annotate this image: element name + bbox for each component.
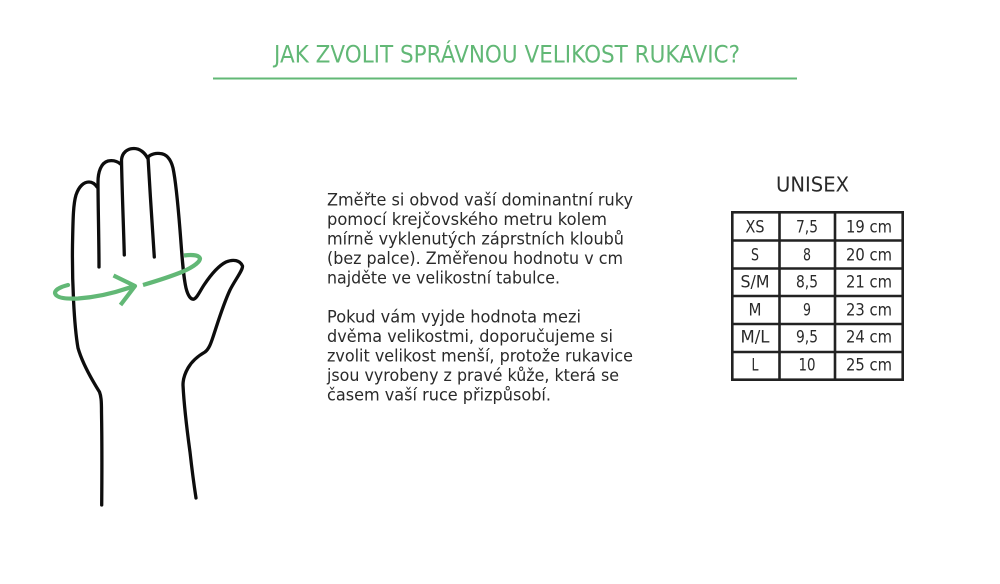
size table	[732, 212, 903, 380]
table row S: 20 cm	[846, 246, 892, 264]
text block: instructions	[326, 190, 633, 404]
table row XS	[746, 218, 892, 236]
paragraph 2	[326, 308, 633, 404]
icon: hand with measuring tape	[55, 148, 243, 505]
paragraph 1: mírně vyklenutých záprstních kloubů	[327, 230, 624, 248]
table row XS: 19 cm	[846, 218, 892, 236]
table row M: 23 cm	[846, 300, 892, 320]
title: JAK ZVOLIT SPRÁVNOU VELIKOST RUKAVIC?	[272, 40, 740, 68]
table row XS: 7,5	[796, 218, 818, 236]
table row M/L: 24 cm	[846, 328, 892, 346]
table row S/M: 21 cm	[846, 272, 892, 292]
table row S: S	[751, 246, 759, 264]
table row XS: XS	[746, 218, 764, 236]
table row M	[748, 300, 892, 320]
paragraph 2: časem vaší ruce přizpůsobí.	[327, 386, 551, 404]
paragraph 1: pomocí krejčovského metru kolem	[327, 210, 607, 229]
table row M/L: M/L	[740, 328, 770, 346]
table row S/M: 8,5	[796, 272, 818, 292]
paragraph 1: (bez palce). Změřenou hodnotu v cm	[327, 249, 623, 268]
paragraph 2: jsou vyrobeny z pravé kůže, která se	[326, 366, 619, 385]
paragraph 2: dvěma velikostmi, doporučujeme si	[327, 327, 613, 346]
green tape	[55, 255, 200, 305]
table row L: 25 cm	[846, 356, 892, 374]
table row L	[752, 356, 892, 374]
table row S	[751, 246, 892, 264]
paragraph 1: Změřte si obvod vaší dominantní ruky	[327, 190, 633, 210]
paragraph 1: najděte ve velikostní tabulce.	[327, 268, 560, 288]
table row S: 8	[803, 246, 811, 264]
paragraph 2: Pokud vám vyjde hodnota mezi	[327, 308, 581, 326]
hand outline	[72, 148, 243, 505]
paragraph 2: zvolit velikost menší, protože rukavice	[327, 346, 633, 366]
table row L: 10	[798, 356, 816, 374]
table row M: M	[748, 300, 762, 320]
table row M/L: 9,5	[796, 328, 818, 346]
table heading: UNISEX	[776, 172, 849, 196]
table row S/M	[740, 272, 892, 292]
table row M/L	[740, 328, 892, 346]
table row L: L	[752, 356, 759, 374]
table grid	[732, 212, 903, 380]
paragraph 1	[327, 190, 633, 288]
table row S/M: S/M	[740, 272, 770, 292]
table row M: 9	[803, 300, 811, 320]
